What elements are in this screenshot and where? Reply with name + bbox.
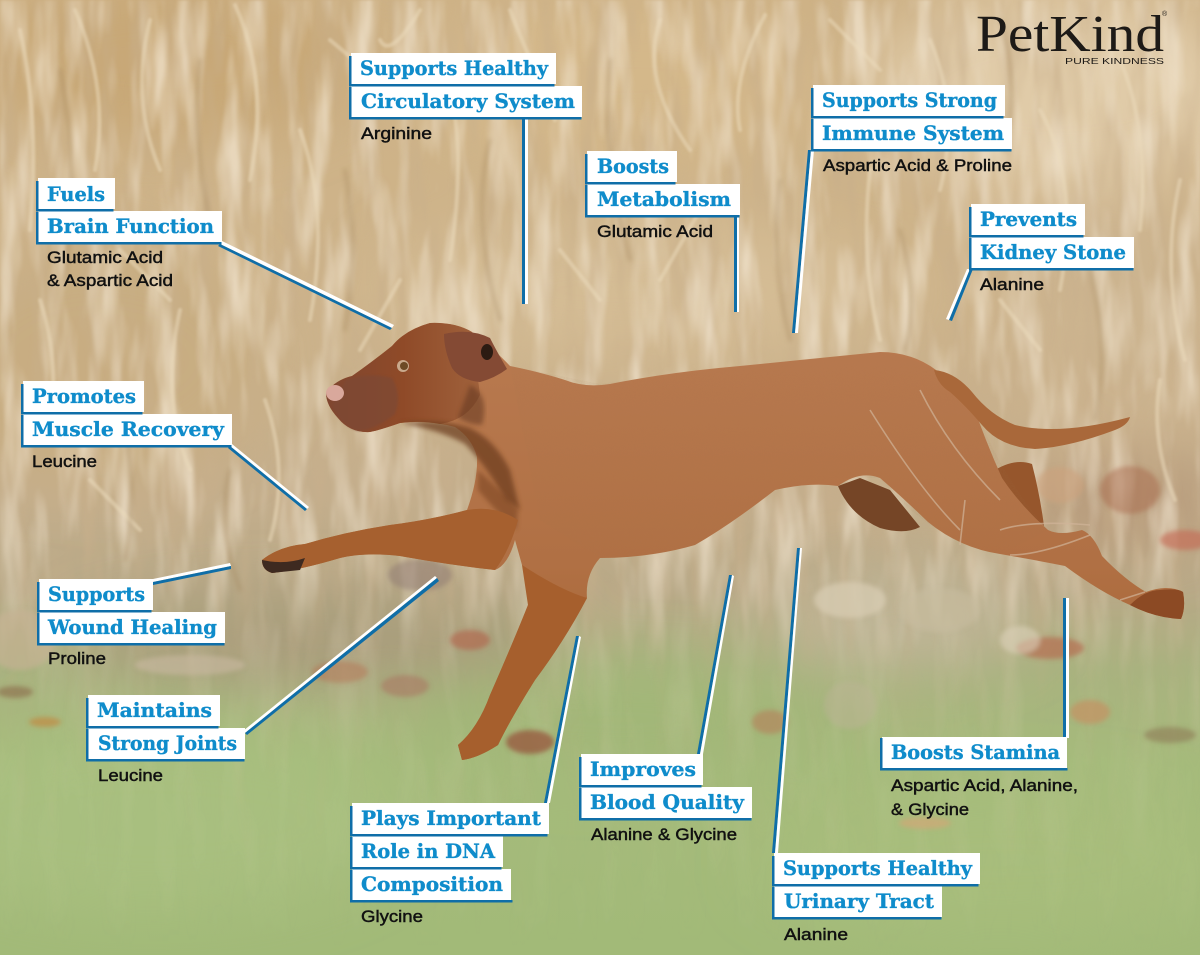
head shading — [326, 323, 480, 432]
amino acids: & Glycine — [891, 801, 969, 819]
callout: Fuels Brain Function — [36, 178, 394, 330]
muzzle — [332, 375, 398, 431]
amino acids: Leucine — [32, 453, 97, 471]
heading bars: Metabolism — [597, 188, 731, 211]
neck shadow — [400, 421, 520, 510]
fur grain — [510, 352, 1048, 558]
ear hole — [481, 344, 493, 360]
callout: Prevents Kidney Stone — [946, 204, 1134, 321]
chest crease — [478, 470, 518, 530]
standing leg tone — [458, 565, 587, 760]
heading bars: Composition — [361, 873, 503, 896]
grass blades across the haunch — [870, 390, 1145, 600]
heading bars: Strong Joints — [98, 732, 237, 755]
heading bar — [880, 737, 1068, 770]
nose — [326, 385, 344, 401]
heading bars: Kidney Stone — [980, 241, 1126, 264]
heading bars: Supports Strong — [822, 89, 997, 112]
callout: Promotes Muscle Recovery — [21, 381, 309, 511]
amino acids — [47, 249, 173, 290]
logo: PetKind: PURE KINDNESS — [1065, 56, 1164, 66]
ear — [444, 332, 507, 382]
heading bars: Role in DNA — [361, 840, 496, 863]
body, legs and head silhouette — [262, 323, 1184, 760]
pointer line — [946, 269, 973, 321]
heading bars: Supports Healthy — [360, 57, 549, 80]
heading bars — [350, 803, 549, 902]
heading bars — [585, 151, 740, 218]
amino acids: Glutamic Acid — [597, 223, 713, 241]
callout: Supports Healthy Urinary Tract — [772, 548, 980, 944]
heading bars: Promotes — [32, 385, 136, 408]
heading bars: Supports — [48, 583, 145, 606]
heading bars: Muscle Recovery — [32, 418, 225, 441]
heading bars: Immune System — [822, 122, 1004, 145]
heading bars: Wound Healing — [47, 616, 217, 639]
dog photo: running vizsla — [262, 323, 1184, 760]
amino acids: Alanine — [784, 926, 848, 944]
heading bars: Blood Quality — [590, 791, 745, 814]
heading bars — [811, 85, 1012, 152]
heading bars — [86, 695, 245, 762]
heading bars: Circulatory System — [361, 90, 575, 113]
callout: Boosts Stamina — [880, 598, 1078, 819]
amino acids: Arginine — [361, 125, 432, 143]
heading bars: Prevents — [980, 208, 1077, 231]
amino acids: Leucine — [98, 767, 163, 785]
heading bars: Brain Function — [47, 215, 214, 238]
amino acids: Aspartic Acid & Proline — [823, 157, 1012, 175]
logo: PetKind: ® — [1162, 10, 1168, 18]
heading bars — [969, 204, 1134, 270]
amino acids: & Aspartic Acid — [47, 272, 173, 290]
pointer line — [1063, 598, 1069, 738]
far hind leg — [995, 462, 1044, 526]
pointer line — [218, 241, 394, 330]
heading bars: Urinary Tract — [784, 890, 934, 913]
heading bars — [349, 53, 582, 120]
callout: Improves Blood Quality — [579, 575, 752, 844]
pointer line — [772, 548, 802, 853]
pointer line — [697, 575, 734, 754]
heading bars — [37, 579, 225, 646]
front paw — [262, 558, 305, 573]
eye — [397, 360, 409, 372]
amino acids: Alanine & Glycine — [591, 826, 737, 844]
amino acids: Alanine — [980, 276, 1044, 294]
callout: Supports Strong Immune System — [792, 85, 1012, 333]
amino acids: Glycine — [361, 908, 423, 926]
amino acids: Glutamic Acid — [47, 249, 163, 267]
heading bars: Improves — [590, 758, 696, 781]
heading bars: Boosts — [597, 155, 669, 178]
hind foot shading — [1130, 589, 1184, 619]
amino acids — [891, 777, 1078, 819]
callout: Boosts Metabolism — [585, 151, 740, 312]
pointer line — [228, 444, 309, 511]
heading bars: Maintains — [97, 699, 212, 722]
tail — [934, 370, 1130, 449]
pointer line — [792, 150, 814, 333]
pointer line — [153, 563, 231, 585]
logo: PetKind: PetKind — [976, 6, 1164, 63]
amino acids: Aspartic Acid, Alanine, — [891, 777, 1078, 795]
amino acids: Proline — [48, 650, 106, 668]
heading bars: Plays Important — [361, 807, 541, 830]
heading bars — [579, 754, 752, 820]
front arm tone — [262, 509, 518, 573]
heading bars: Supports Healthy — [783, 857, 973, 880]
pointer line — [243, 576, 439, 735]
pointer line — [522, 118, 528, 304]
pointer line — [734, 216, 739, 312]
pointer line — [544, 636, 581, 803]
callout: Supports Wound Healing — [37, 563, 231, 668]
heading bars: Fuels — [47, 183, 105, 206]
callout: Supports Healthy Circulatory System — [349, 53, 582, 304]
callout: Plays Important Role in DNA Composition — [350, 636, 581, 926]
heading bars — [772, 853, 980, 920]
belly shadow — [838, 478, 920, 531]
heading bar: Boosts Stamina — [891, 741, 1060, 764]
heading bars — [36, 178, 222, 244]
callout: Maintains Strong Joints — [86, 576, 439, 785]
heading bars — [21, 381, 232, 448]
